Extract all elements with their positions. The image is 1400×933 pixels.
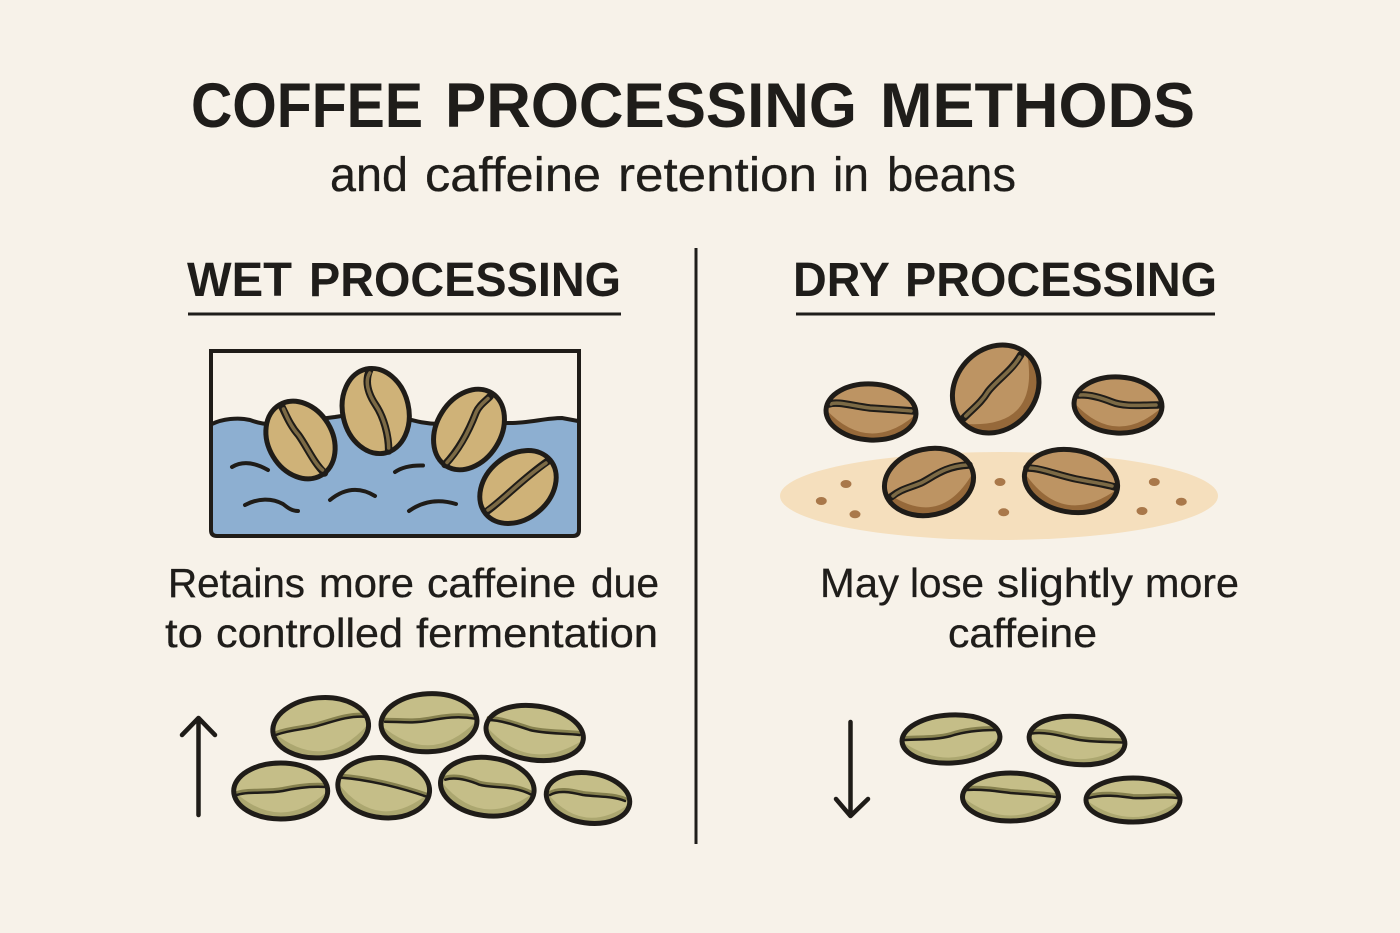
sand patch [780, 452, 1218, 540]
heading: wet processing: WET [187, 254, 292, 307]
subtitle: and [330, 149, 408, 202]
bean: green 7 [543, 767, 633, 829]
bean: wet 4 [465, 435, 571, 539]
subtitle: retention [618, 149, 817, 202]
bean: dry-side green 4 [1086, 778, 1180, 822]
panel: wet processing [165, 254, 659, 829]
bean: dry-side green 3 [962, 773, 1058, 821]
bean: wet 2 [334, 362, 418, 460]
illustration: beans floating in water tank [211, 351, 579, 539]
title: METHODS [880, 71, 1195, 141]
subtitle: beans [887, 149, 1016, 202]
illustration: beans drying on sand [780, 327, 1218, 540]
bean: green 4 [234, 763, 328, 819]
icon: up arrow [182, 718, 215, 815]
text: wet description: fermentation [416, 610, 658, 656]
bean: dry 5 [1019, 442, 1123, 520]
bean: dry 3 [1073, 375, 1163, 435]
text: dry description: slightly [997, 560, 1134, 606]
bean: green 1 [270, 694, 371, 762]
title: PROCESSING [445, 71, 857, 141]
bean: green 6 [437, 752, 537, 821]
panel: dry processing [780, 254, 1239, 822]
heading: wet processing [187, 254, 621, 314]
text: dry description: lose [910, 560, 984, 606]
title: COFFEE [191, 71, 423, 141]
heading: dry processing: DRY [793, 254, 890, 307]
bean: dry-side green 1 [901, 712, 1001, 766]
bean: wet 3 [419, 376, 519, 483]
heading: dry processing [793, 254, 1217, 314]
bean: wet 1 [252, 388, 349, 492]
bean: green 3 [482, 699, 587, 767]
sand specks [816, 478, 1187, 518]
icon: down arrow [836, 722, 868, 816]
subtitle: caffeine [425, 149, 601, 202]
subtitle: in [833, 149, 869, 202]
bean: dry 1 [825, 382, 917, 442]
text: wet description: caffeine [427, 560, 576, 606]
text: wet description: controlled [216, 610, 403, 656]
text: dry description: May [820, 560, 899, 606]
bean: dry 2 [935, 327, 1057, 451]
text: wet description: Retains [168, 560, 305, 606]
text: dry description: more [1145, 560, 1239, 606]
text: dry description [820, 560, 1239, 656]
bean: dry 4 [878, 440, 980, 524]
bean: dry-side green 2 [1027, 712, 1127, 769]
text: wet description: more [319, 560, 414, 606]
green beans: more caffeine pile [234, 691, 633, 829]
bean: green 2 [380, 691, 478, 754]
text: dry description: caffeine [948, 610, 1097, 656]
green beans: less caffeine pile [901, 712, 1180, 822]
bean: green 5 [335, 753, 433, 822]
text: wet description: due [591, 560, 659, 606]
heading: dry processing: PROCESSING [905, 254, 1217, 307]
heading: wet processing: PROCESSING [309, 254, 621, 307]
text: wet description [165, 560, 659, 656]
text: wet description: to [165, 610, 203, 656]
